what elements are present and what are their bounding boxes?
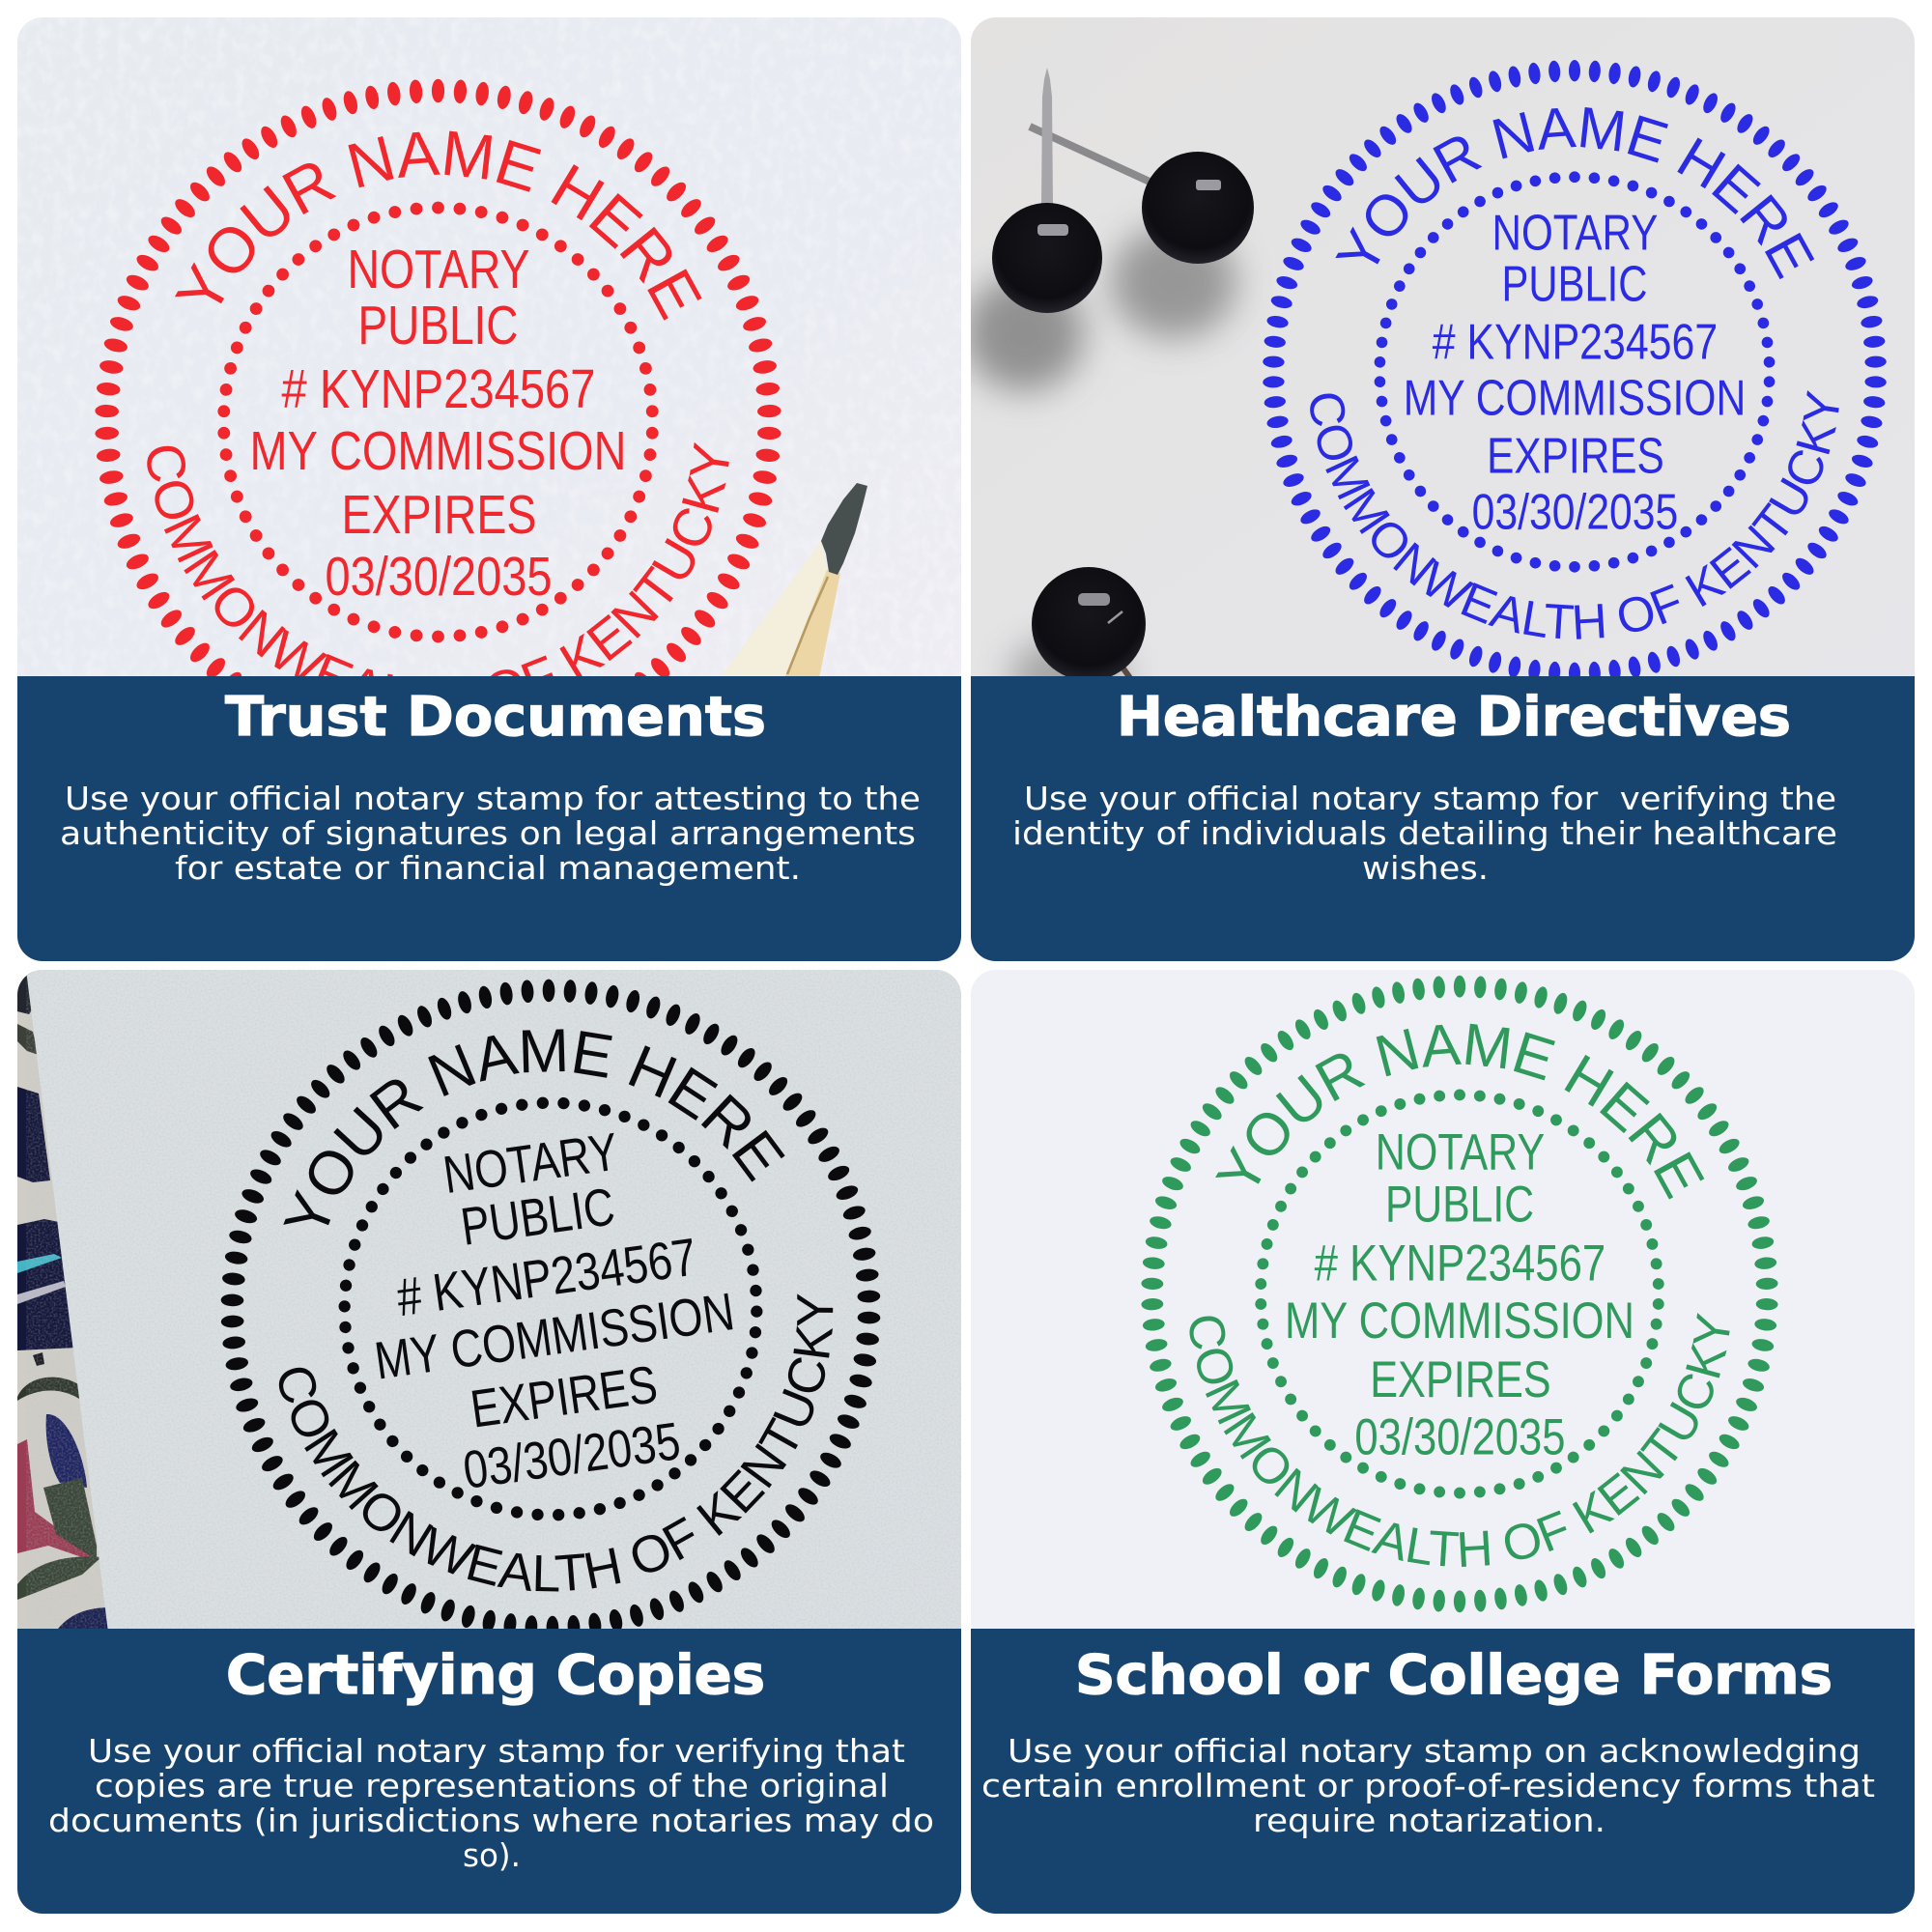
body text: require notarization. bbox=[1253, 1802, 1605, 1839]
body text: Use your official notary stamp on acknowledging bbox=[1008, 1732, 1861, 1770]
stamp: green notary seal: # KYNP234567 bbox=[1315, 1236, 1605, 1293]
heading: School or College Forms bbox=[1075, 1644, 1833, 1707]
body text: Use your official notary stamp for verifying that bbox=[88, 1732, 905, 1770]
panel: School or College Forms bbox=[971, 970, 1915, 1914]
panel: Certifying Copies bbox=[17, 970, 961, 1914]
caption band bbox=[971, 1629, 1915, 1914]
stamp: red notary seal: PUBLIC bbox=[357, 295, 518, 356]
stamp: green notary seal: NOTARY bbox=[1376, 1124, 1545, 1181]
body text: Use your official notary stamp for attesting to the bbox=[65, 780, 921, 817]
stamp: red notary seal: YOUR NAME HERE bbox=[174, 131, 702, 321]
stamp: blue notary seal: 03/30/2035 bbox=[1472, 484, 1678, 540]
photo: black push pins bbox=[964, 17, 1915, 715]
body text: authenticity of signatures on legal arrangements bbox=[60, 814, 916, 852]
caption band bbox=[971, 676, 1915, 961]
stamp: green notary seal: MY COMMISSION bbox=[1285, 1293, 1634, 1350]
stamp: black notary seal: EXPIRES bbox=[467, 1353, 661, 1439]
stamp: green notary seal bbox=[1141, 976, 1777, 1613]
photo: paper with pencil bbox=[17, 17, 961, 694]
stamp: red notary seal: COMMONWEALTH OF KENTUCKY bbox=[147, 442, 729, 676]
body text: certain enrollment or proof-of-residency forms that bbox=[981, 1767, 1875, 1804]
body text: wishes. bbox=[1362, 849, 1489, 887]
stamp: green notary seal: COMMONWEALTH OF KENTUCKY bbox=[1189, 1313, 1730, 1567]
stamp: blue notary seal: YOUR NAME HERE bbox=[1335, 107, 1814, 280]
stamp: blue notary seal: EXPIRES bbox=[1487, 428, 1664, 484]
body text bbox=[60, 780, 921, 887]
stamp: black notary seal: PUBLIC bbox=[457, 1176, 618, 1257]
panel: Healthcare Directives bbox=[971, 17, 1915, 961]
body text: identity of individuals detailing their healthcare bbox=[1012, 814, 1837, 852]
body text bbox=[1012, 780, 1837, 887]
stamp: blue notary seal: MY COMMISSION bbox=[1404, 370, 1746, 426]
stamp: black notary seal: YOUR NAME HERE bbox=[283, 1029, 785, 1225]
stamp: black notary seal: 03/30/2035 bbox=[460, 1410, 684, 1500]
stamp: green notary seal: PUBLIC bbox=[1385, 1176, 1534, 1233]
body text: for estate or financial management. bbox=[175, 849, 801, 887]
body text: copies are true representations of the original bbox=[95, 1767, 889, 1804]
stamp: blue notary seal bbox=[1263, 60, 1887, 676]
body text: so). bbox=[463, 1836, 521, 1874]
stamp: black notary seal bbox=[220, 980, 881, 1629]
body text bbox=[48, 1732, 934, 1874]
stamp: green notary seal: EXPIRES bbox=[1370, 1351, 1551, 1408]
stamp: green notary seal: 03/30/2035 bbox=[1354, 1409, 1566, 1466]
stamp: blue notary seal: NOTARY bbox=[1492, 205, 1658, 261]
stamp: red notary seal bbox=[95, 79, 781, 676]
caption band bbox=[17, 1629, 961, 1914]
heading: Trust Documents bbox=[225, 686, 766, 749]
body text: documents (in jurisdictions where notaries may do bbox=[48, 1802, 934, 1839]
heading: Healthcare Directives bbox=[1117, 686, 1791, 749]
stamp: red notary seal: # KYNP234567 bbox=[282, 358, 595, 420]
body text: Use your official notary stamp for verifying the bbox=[1024, 780, 1836, 817]
stamp: green notary seal: YOUR NAME HERE bbox=[1215, 1024, 1704, 1200]
stamp: blue notary seal: PUBLIC bbox=[1502, 255, 1647, 311]
panel: Trust Documents bbox=[17, 17, 961, 961]
stamp: red notary seal: NOTARY bbox=[348, 239, 529, 300]
photo: paper over floral fabric bbox=[17, 970, 961, 1636]
stamp: red notary seal: MY COMMISSION bbox=[249, 420, 626, 482]
photo: plain pale background bbox=[971, 970, 1915, 1646]
caption band bbox=[17, 676, 961, 961]
heading: Certifying Copies bbox=[226, 1644, 765, 1707]
stamp: black notary seal: COMMONWEALTH OF KENTUCKY bbox=[278, 1293, 833, 1592]
stamp: blue notary seal: # KYNP234567 bbox=[1433, 313, 1718, 369]
body text bbox=[981, 1732, 1875, 1839]
stamp: red notary seal: 03/30/2035 bbox=[325, 546, 553, 608]
stamp: black notary seal: NOTARY bbox=[440, 1122, 621, 1205]
stamp: black notary seal: # KYNP234567 bbox=[393, 1226, 700, 1327]
stamp: blue notary seal: COMMONWEALTH OF KENTUCKY bbox=[1310, 390, 1839, 639]
stamp: black notary seal: MY COMMISSION bbox=[371, 1281, 738, 1391]
stamp: red notary seal: EXPIRES bbox=[342, 484, 537, 546]
